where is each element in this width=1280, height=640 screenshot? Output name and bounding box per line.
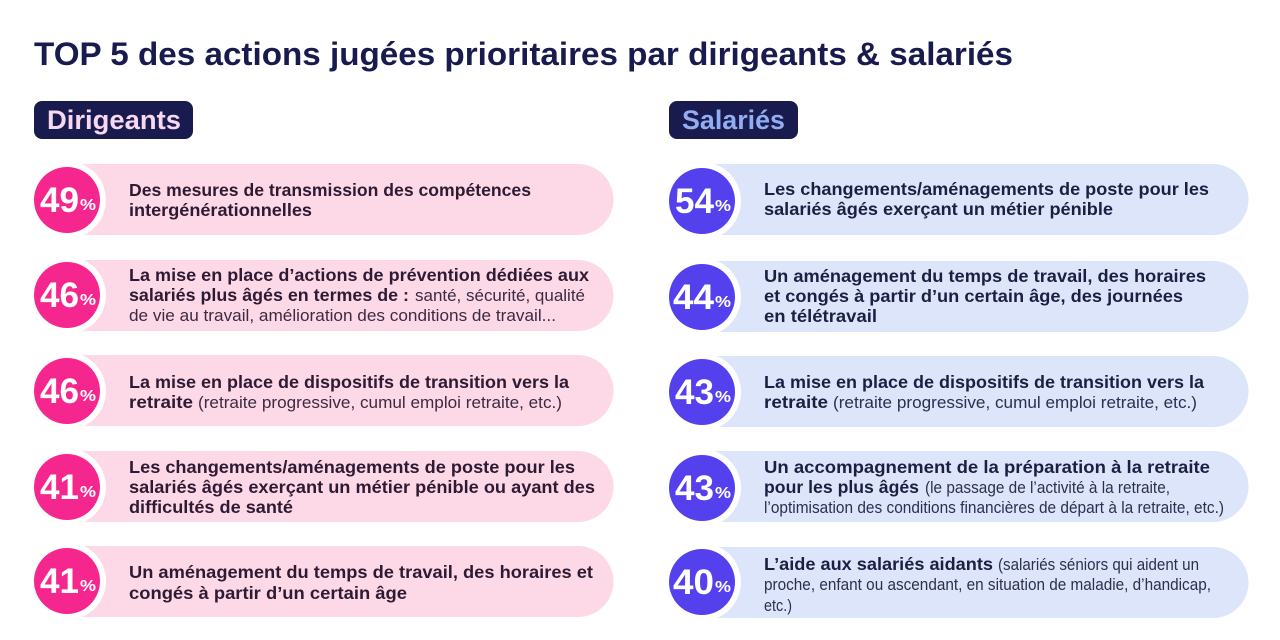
row: 46% transition: La mise en place de dispositifs de transition vers la — [129, 372, 569, 392]
row: 46% transition: 46 — [40, 372, 79, 411]
row: 43% transition: 43 — [675, 373, 714, 412]
row: 54%: 54 — [675, 182, 715, 221]
row: 41% postes: salariés âgés exerçant un métier pénible ou ayant des — [129, 477, 595, 497]
row: 49%: 49 — [40, 181, 79, 220]
row: 43% transition: La mise en place de dispositifs de transition vers la — [764, 372, 1204, 392]
row: 40% aidants: % — [715, 579, 731, 596]
row: 41% temps de travail: congés à partir d’un certain âge — [129, 583, 407, 603]
row: 54%: salariés âgés exerçant un métier pénible — [764, 199, 1113, 219]
row: 41% postes: % — [80, 484, 96, 501]
row: 41% postes: difficultés de santé — [129, 497, 293, 517]
row: 44%: 44 — [673, 278, 715, 317]
row: 49%: % — [80, 197, 96, 214]
row: 46% prevention: 46 — [40, 276, 79, 315]
row: 46% prevention — [28, 256, 613, 334]
row: 41% temps de travail: % — [80, 578, 96, 595]
row: 40% aidants — [663, 543, 1248, 621]
row: 44%: et congés à partir d’un certain âge, des journées — [764, 286, 1183, 306]
row: 43% transition: retraite — [764, 392, 828, 412]
row: 49% — [28, 161, 614, 239]
row: 43% preparation: 43 — [675, 469, 714, 508]
row: 54% — [663, 162, 1248, 240]
panel: dirigeants — [28, 101, 614, 620]
row: 49%: Des mesures de transmission des compétences — [129, 180, 531, 200]
row: 43% preparation: pour les plus âgés — [764, 477, 919, 497]
row: 46% transition — [28, 352, 614, 430]
row: 46% prevention: % — [80, 292, 96, 309]
heading badge: Dirigeants: Dirigeants — [47, 105, 181, 135]
row: 40% aidants: (salariés séniors qui aident un — [998, 556, 1199, 574]
row: 41% temps de travail — [28, 542, 614, 620]
row: 41% temps de travail: 41 — [40, 562, 79, 601]
heading badge: Salariés: Salariés — [682, 105, 785, 135]
row: 44% — [663, 258, 1248, 336]
row: 41% temps de travail: Un aménagement du temps de travail, des horaires et — [129, 562, 593, 582]
heading badge: Dirigeants — [34, 101, 193, 139]
row: 40% aidants: L’aide aux salariés aidants — [764, 554, 993, 574]
row: 43% transition: (retraite progressive, cumul emploi retraite, etc.) — [833, 394, 1197, 412]
row: 46% transition: retraite — [129, 392, 193, 412]
row: 40% aidants: 40 — [673, 563, 714, 602]
row: 40% aidants: proche, enfant ou ascendant, en situation de maladie, d’handicap, — [764, 576, 1211, 594]
row: 46% prevention: de vie au travail, amélioration des conditions de travail... — [129, 307, 556, 325]
row: 44%: % — [715, 294, 731, 311]
row: 44%: Un aménagement du temps de travail, des horaires — [764, 266, 1206, 286]
row: 54%: Les changements/aménagements de poste pour les — [764, 179, 1209, 199]
row: 43% preparation: % — [715, 485, 731, 502]
row: 43% preparation: (le passage de l’activité à la retraite, — [925, 479, 1170, 497]
row: 43% preparation — [663, 449, 1248, 527]
title: TOP 5 des actions jugées prioritaires par dirigeants & salariés — [34, 36, 1013, 72]
row: 43% preparation: l’optimisation des conditions financières de départ à la retraite, etc.) — [764, 499, 1224, 517]
row: 54%: % — [715, 198, 731, 215]
row: 43% transition: % — [715, 389, 731, 406]
row: 43% transition — [663, 353, 1248, 431]
panel: salaries — [663, 101, 1248, 621]
row: 46% prevention: La mise en place d’actions de prévention dédiées aux — [129, 265, 589, 285]
row: 41% postes: Les changements/aménagements de poste pour les — [129, 457, 575, 477]
row: 46% prevention: santé, sécurité, qualité — [415, 287, 585, 305]
row: 46% prevention: salariés plus âgés en termes de : — [129, 285, 409, 305]
row: 46% transition: (retraite progressive, cumul emploi retraite, etc.) — [198, 394, 562, 412]
row: 41% postes — [28, 448, 614, 526]
row: 46% transition: % — [80, 388, 96, 405]
heading badge: Salariés — [669, 101, 798, 139]
row: 40% aidants: etc.) — [764, 597, 792, 615]
row: 44%: en télétravail — [764, 306, 877, 326]
row: 43% preparation: Un accompagnement de la préparation à la retraite — [764, 457, 1210, 477]
row: 41% postes: 41 — [40, 468, 79, 507]
row: 49%: intergénérationnelles — [129, 200, 312, 220]
